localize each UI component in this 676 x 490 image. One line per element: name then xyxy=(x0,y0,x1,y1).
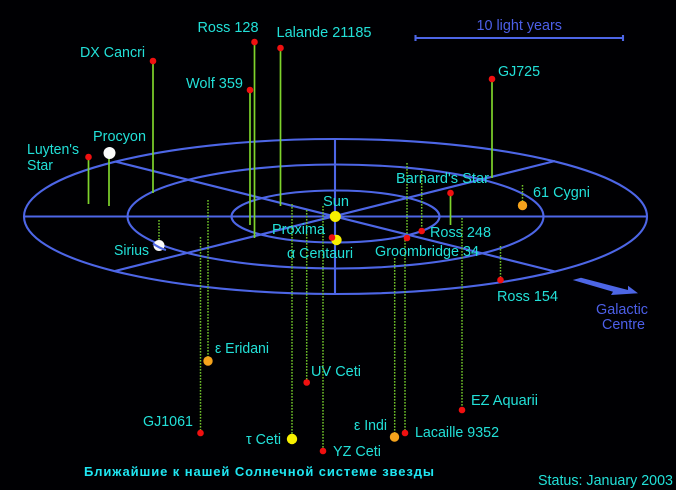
star: Ross 128: Ross 128 xyxy=(198,19,258,36)
star: Tau Ceti xyxy=(246,204,297,448)
star: Sirius xyxy=(114,220,166,259)
star: 61 Cygni: 61 Cygni xyxy=(533,184,590,201)
star: UV Ceti: UV Ceti xyxy=(311,363,361,380)
star: GJ1061: GJ1061 xyxy=(143,413,193,430)
star: Procyon: Procyon xyxy=(93,128,146,145)
star: Sun xyxy=(323,193,349,222)
star: Epsilon Indi xyxy=(354,258,399,442)
star: Luyten's Star: Luyten's xyxy=(27,141,79,158)
star: Alpha Centauri: α Centauri xyxy=(287,245,353,262)
star: Epsilon Eridani xyxy=(203,200,269,366)
star: DX Cancri: DX Cancri xyxy=(80,44,145,61)
galactic plane grid xyxy=(24,139,647,294)
star: EZ Aquarii xyxy=(459,218,538,413)
star: Luyten's Star xyxy=(27,141,92,204)
star: DX Cancri xyxy=(80,44,156,193)
star: 61 Cygni xyxy=(518,184,590,210)
star: Sun: Sun xyxy=(323,193,349,210)
star: GJ1061 xyxy=(143,237,204,436)
star: Lalande 21185: Lalande 21185 xyxy=(276,24,372,41)
star: Ross 154: Ross 154 xyxy=(497,288,558,305)
star: Procyon xyxy=(93,128,146,206)
star: GJ725 xyxy=(489,63,540,178)
star: Wolf 359: Wolf 359 xyxy=(186,75,243,92)
star: Lalande 21185 xyxy=(276,24,372,206)
arrow: Galactic Centre xyxy=(573,278,648,333)
star: YZ Ceti: YZ Ceti xyxy=(333,443,381,460)
star: Wolf 359 xyxy=(186,75,253,225)
star: Lacaille 9352 xyxy=(402,240,499,441)
star: Sirius: Sirius xyxy=(114,242,149,259)
star: Groombridge 34: Groombridge 34 xyxy=(375,243,479,260)
status note: Status: January 2003 xyxy=(538,472,673,489)
star: Epsilon Eridani: ε Eridani xyxy=(215,340,269,357)
star: Ross 248 xyxy=(430,190,491,241)
star: GJ725: GJ725 xyxy=(498,63,540,80)
star: Luyten's Star: Star xyxy=(27,157,53,174)
star: UV Ceti xyxy=(303,210,361,386)
star: Lacaille 9352: Lacaille 9352 xyxy=(415,424,499,441)
arrow: Galactic Centre: Centre xyxy=(602,316,645,333)
star: Barnard's Star: Barnard's Star xyxy=(396,170,489,187)
arrow: Galactic Centre: Galactic xyxy=(596,301,648,318)
star: YZ Ceti xyxy=(320,206,381,460)
scale bar: 10 light years xyxy=(416,17,623,41)
star: Alpha Centauri xyxy=(287,235,353,262)
title: Ближайшие к нашей Солнечной системе звезды xyxy=(84,464,434,479)
star: Ross 248: Ross 248 xyxy=(430,224,491,241)
star: Epsilon Indi: ε Indi xyxy=(354,417,387,434)
star: Proxima: Proxima xyxy=(272,221,326,238)
star: Ross 154 xyxy=(497,246,558,305)
star: Groombridge 34 xyxy=(375,163,479,260)
star: Barnard's Star xyxy=(396,170,489,234)
star: EZ Aquarii: EZ Aquarii xyxy=(471,392,538,409)
scale bar: 10 light years: 10 light years xyxy=(476,17,562,34)
star: Ross 128 xyxy=(198,19,258,238)
star: Tau Ceti: τ Ceti xyxy=(246,431,281,448)
